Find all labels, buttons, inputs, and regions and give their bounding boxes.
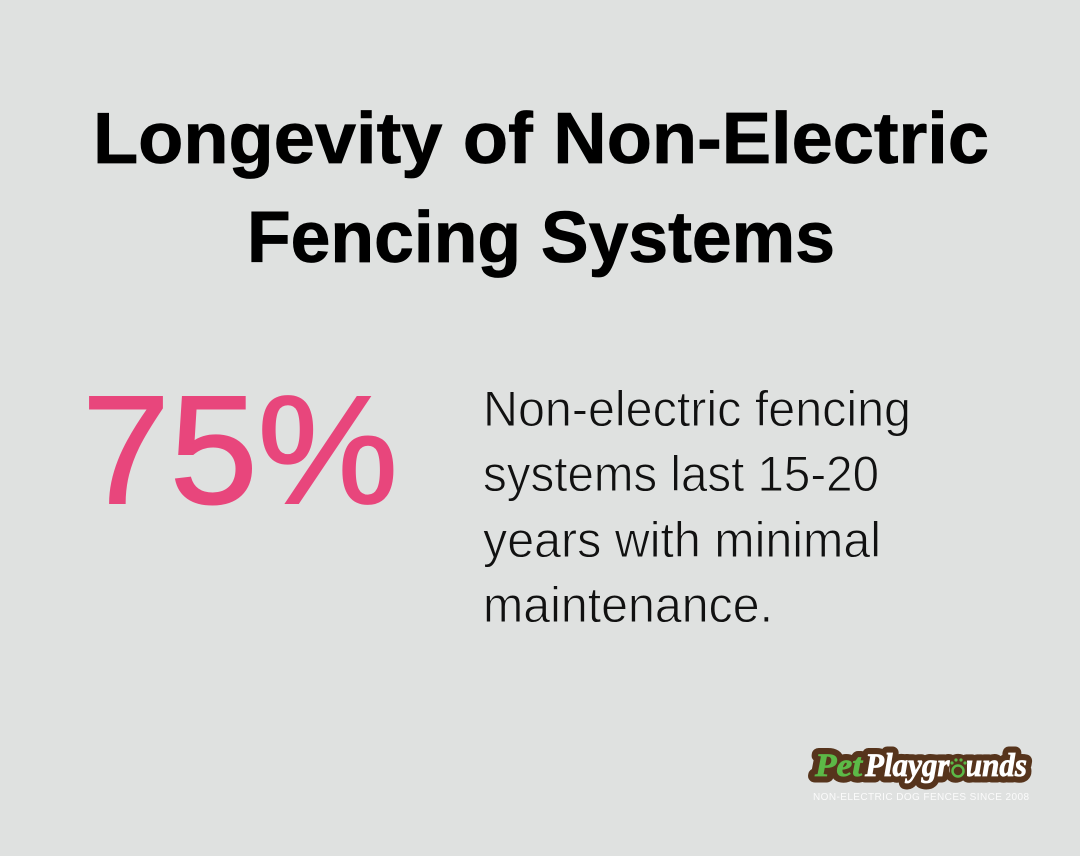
logo wordmark: Playgrounds bbox=[864, 748, 1027, 784]
stat description: systems last 15-20 bbox=[483, 446, 879, 502]
title: Longevity of Non-Electric bbox=[93, 99, 989, 179]
stat description bbox=[483, 381, 911, 633]
logo outline: Playgrounds bbox=[864, 748, 1027, 784]
icon: paw bbox=[950, 758, 967, 779]
big stat: 75%: 75% bbox=[82, 364, 398, 536]
logo tagline: NON-ELECTRIC DOG FENCES SINCE 2008 bbox=[813, 792, 1029, 803]
logo outline: Pet bbox=[814, 748, 863, 784]
stat description: maintenance. bbox=[483, 577, 773, 633]
logo: Pet Playgrounds bbox=[813, 748, 1029, 803]
logo wordmark: Pet bbox=[814, 748, 863, 784]
stat description: Non-electric fencing bbox=[483, 381, 911, 437]
title: Fencing Systems bbox=[247, 198, 835, 278]
title bbox=[93, 99, 989, 278]
stat description: years with minimal bbox=[483, 512, 881, 568]
